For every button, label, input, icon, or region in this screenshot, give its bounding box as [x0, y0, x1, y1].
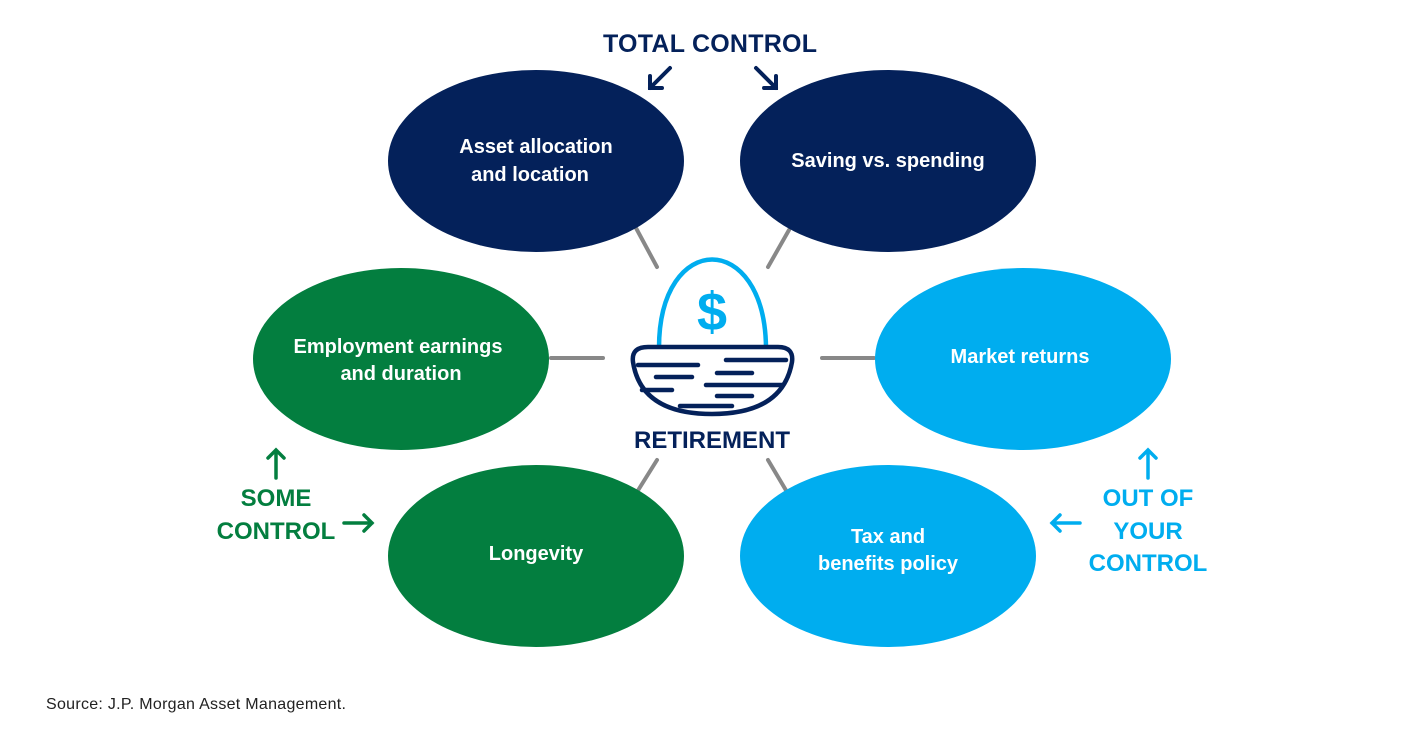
- arrows: out of control: [1052, 450, 1156, 531]
- bubble: asset allocation: and location: [471, 164, 589, 186]
- bubble: saving vs spending: Saving vs. spending: [791, 150, 985, 172]
- bubble: asset allocation: Asset allocation: [459, 136, 613, 158]
- label: some control: [217, 485, 335, 545]
- icon: nest egg: [633, 260, 792, 414]
- bubble: saving vs spending: [740, 70, 1036, 252]
- bubble: employment: Employment earnings: [294, 336, 502, 358]
- bubble: market returns: [875, 268, 1171, 450]
- bubble: employment: and duration: [340, 363, 462, 385]
- label: retirement: RETIREMENT: [634, 427, 790, 454]
- icon: nest egg: $: [697, 282, 727, 342]
- bubble: tax: [740, 465, 1036, 647]
- label: some control: CONTROL: [217, 518, 335, 545]
- connectors: [551, 228, 874, 492]
- label: out of your control: OUT OF: [1103, 485, 1193, 512]
- title: total control: TOTAL CONTROL: [603, 30, 817, 58]
- bubble: longevity: Longevity: [489, 543, 584, 565]
- source: Source: J.P. Morgan Asset Management.: [46, 696, 346, 713]
- bubble: employment: [253, 268, 549, 450]
- bubble: asset allocation: [388, 70, 684, 252]
- bubble: longevity: [388, 465, 684, 647]
- label: some control: SOME: [241, 485, 311, 512]
- label: out of your control: CONTROL: [1089, 550, 1207, 577]
- bubble: tax: benefits policy: [818, 553, 959, 575]
- bubble: market returns: Market returns: [951, 346, 1089, 368]
- label: out of your control: [1089, 485, 1207, 577]
- arrows: some control: [268, 450, 372, 531]
- label: out of your control: YOUR: [1113, 518, 1183, 545]
- arrows: total control: [650, 68, 776, 88]
- bubble: tax: Tax and: [851, 526, 925, 548]
